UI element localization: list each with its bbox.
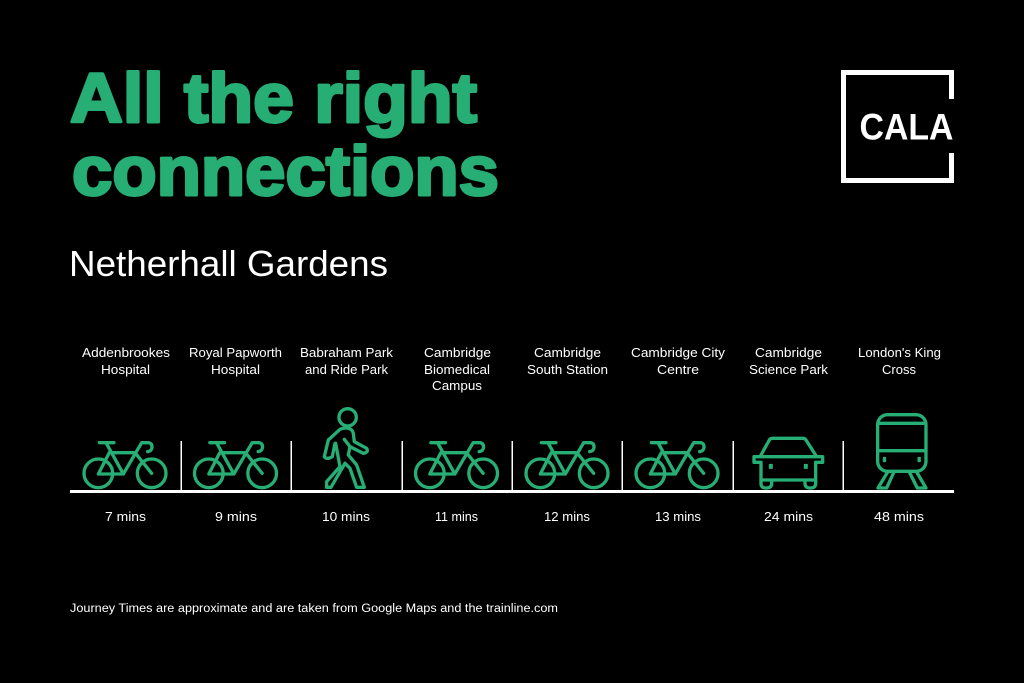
destination labels: Biomedical bbox=[424, 363, 490, 377]
timeline axis with dividers bbox=[70, 441, 954, 493]
icon: bicycle 3 bbox=[415, 443, 497, 488]
logo: CALA: CALA bbox=[860, 106, 954, 148]
icon: bicycle 1 bbox=[84, 443, 166, 488]
journey times: 7 mins bbox=[105, 510, 146, 524]
title bbox=[70, 59, 499, 210]
journey times: 10 mins bbox=[322, 510, 370, 524]
icon: bicycle 4 bbox=[526, 443, 608, 488]
destination labels: Cambridge City bbox=[631, 346, 726, 360]
destination labels: Cambridge bbox=[424, 346, 491, 360]
destination labels: Cambridge bbox=[755, 346, 822, 360]
icon: bicycle 2 bbox=[194, 443, 276, 488]
icon: bicycle 5 bbox=[636, 443, 718, 488]
icon: train bbox=[878, 415, 926, 488]
title: All the right bbox=[70, 59, 477, 137]
destination labels: South Station bbox=[527, 363, 608, 377]
journey times: 9 mins bbox=[215, 510, 257, 524]
logo: CALA bbox=[844, 72, 954, 180]
icon: car bbox=[754, 438, 823, 488]
journey times bbox=[105, 510, 924, 524]
destination labels: Campus bbox=[432, 379, 482, 393]
destination labels: Hospital bbox=[211, 363, 260, 377]
journey times: 13 mins bbox=[655, 510, 701, 524]
journey times: 11 mins bbox=[435, 510, 478, 524]
destination labels: Hospital bbox=[101, 363, 150, 377]
icon: walking person bbox=[324, 409, 367, 487]
destination labels: and Ride Park bbox=[305, 363, 389, 377]
destination labels: Babraham Park bbox=[300, 346, 394, 360]
destination labels: Centre bbox=[657, 363, 699, 377]
destination labels: Science Park bbox=[749, 363, 829, 377]
destination labels bbox=[82, 346, 941, 393]
subtitle: Netherhall Gardens bbox=[69, 243, 388, 284]
journey times: 48 mins bbox=[874, 510, 924, 524]
footnote: Journey Times are approximate and are taken from Google Maps and the trainline.com bbox=[70, 603, 558, 615]
journey times: 12 mins bbox=[544, 510, 590, 524]
destination labels: Cambridge bbox=[534, 346, 601, 360]
title: connections bbox=[72, 132, 499, 210]
destination labels: London's King bbox=[858, 346, 941, 360]
destination labels: Royal Papworth bbox=[189, 346, 282, 360]
destination labels: Addenbrookes bbox=[82, 346, 170, 360]
journey times: 24 mins bbox=[764, 510, 813, 524]
destination labels: Cross bbox=[882, 363, 916, 377]
